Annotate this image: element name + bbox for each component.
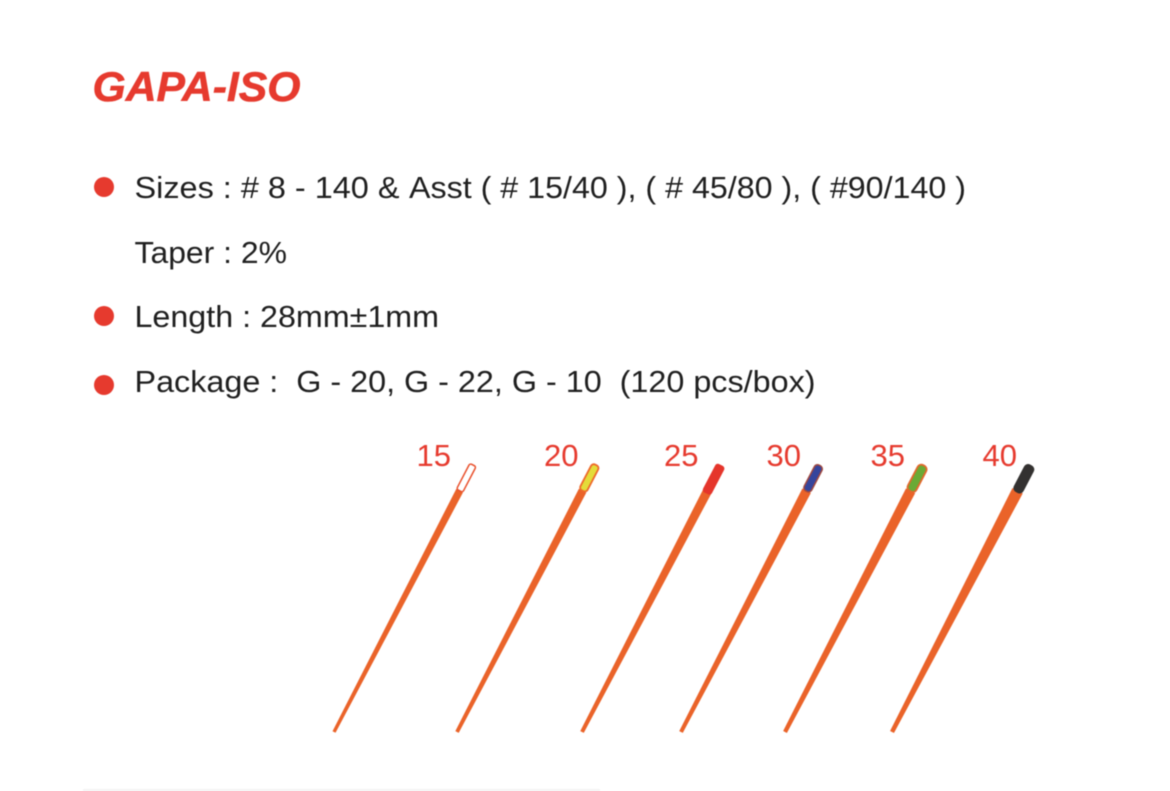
text: sizes: Asst ( # 15/40 ), ( # 45/80 ), ( #90/140 ) bbox=[409, 170, 966, 205]
size label 35: 35 bbox=[870, 438, 905, 473]
title: GAPA-ISO bbox=[92, 63, 300, 110]
paper point 25: red cap bbox=[578, 463, 725, 734]
size label 15: 15 bbox=[416, 438, 451, 473]
paper point 35: green cap bbox=[780, 463, 928, 734]
size label 20: 20 bbox=[544, 438, 578, 473]
text: package: Package : G - 20, G - 22, G - 10 (120 pcs/box) bbox=[134, 364, 816, 399]
text: length: Length : 28mm±1mm bbox=[134, 299, 439, 334]
text: sizes: Sizes : # 8 - 140 & bbox=[134, 170, 400, 205]
size label 30: 30 bbox=[766, 438, 801, 473]
text: taper: Taper : 2% bbox=[134, 235, 287, 270]
paper point 40: black cap bbox=[887, 462, 1036, 735]
paper point 30: blue cap bbox=[677, 463, 824, 734]
size label 25: 25 bbox=[664, 438, 698, 473]
size label 40: 40 bbox=[982, 438, 1017, 473]
paper point 15: white cap bbox=[331, 463, 476, 734]
bullet: sizes bbox=[94, 177, 114, 197]
paper point 20: yellow cap bbox=[453, 463, 600, 734]
bullet: length bbox=[94, 306, 114, 326]
bullet: package bbox=[94, 375, 114, 395]
